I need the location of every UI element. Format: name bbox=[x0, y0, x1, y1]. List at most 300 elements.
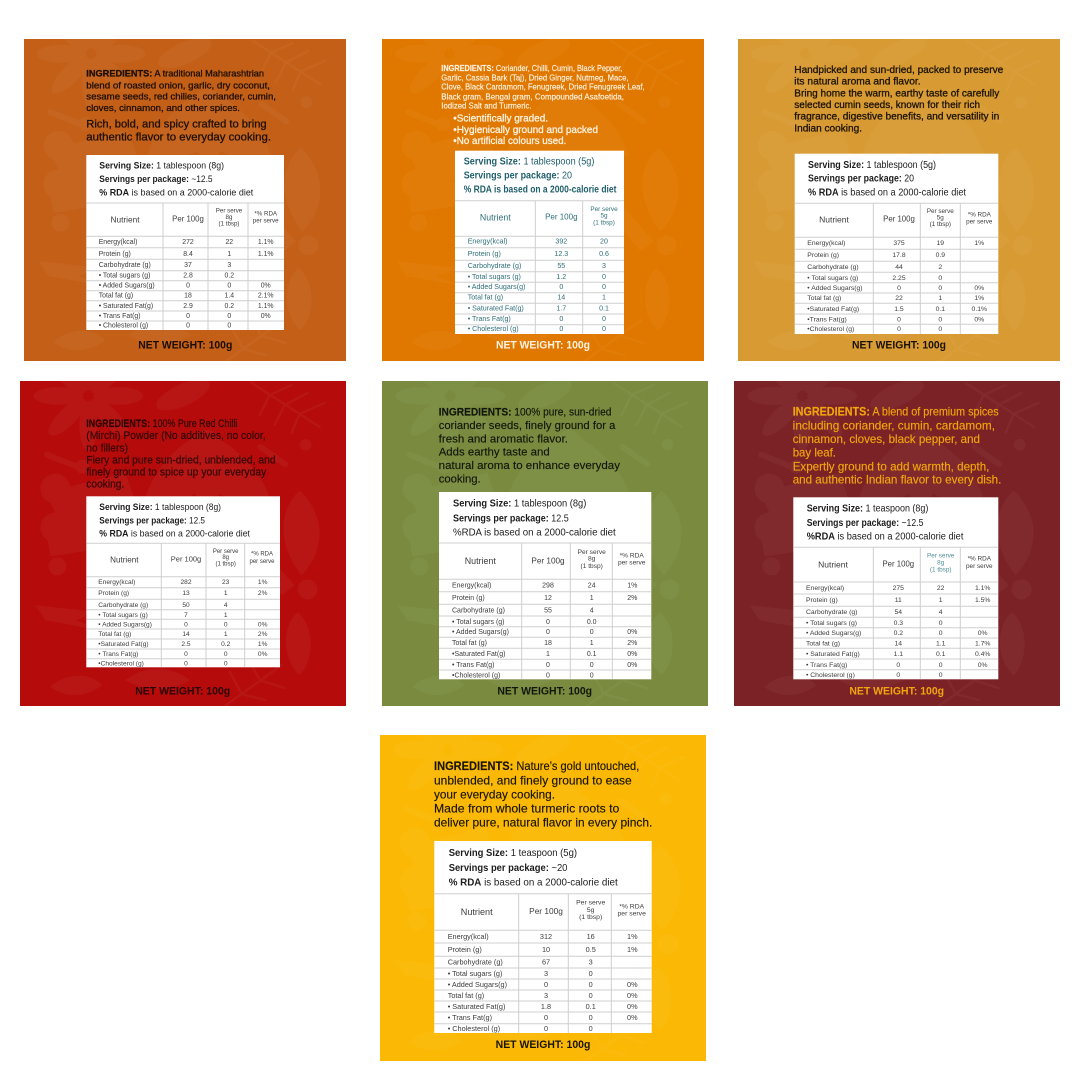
table rows: Total fat (g) bbox=[99, 292, 133, 300]
serving information bbox=[464, 156, 617, 196]
table rows: 0 bbox=[939, 672, 943, 679]
table rows: Total fat (g) bbox=[806, 640, 840, 648]
table rows: Carbohydrate (g) bbox=[452, 608, 505, 614]
table rows: •Saturated Fat(g) bbox=[98, 641, 149, 648]
table rows: 0% bbox=[974, 285, 984, 292]
table rows: 2.1% bbox=[258, 292, 274, 300]
table rows: • Added Sugars(g) bbox=[807, 285, 863, 292]
ingredients text: Black gram, Bengal gram, Compounded Asafoetida, bbox=[441, 92, 624, 101]
table rows: 0 bbox=[544, 1024, 548, 1033]
table rows: 2.5 bbox=[181, 641, 191, 648]
table rows: 1 bbox=[590, 640, 594, 647]
table header: (1 tbsp) bbox=[216, 562, 236, 568]
table header: per serve bbox=[618, 911, 646, 918]
table rows: 1 bbox=[224, 612, 228, 619]
table rows: Energy(kcal) bbox=[98, 579, 135, 586]
table rows: 298 bbox=[542, 582, 554, 590]
serving information: Serving Size: 1 teaspoon (5g) bbox=[449, 848, 577, 859]
table header: *% RDA bbox=[968, 556, 992, 563]
table header: per serve bbox=[249, 559, 275, 565]
table rows: 1% bbox=[258, 579, 268, 586]
table rows: 0 bbox=[602, 325, 606, 333]
ingredients text bbox=[86, 68, 276, 143]
table rows: 19 bbox=[937, 240, 944, 247]
ingredients text: Iodized Salt and Turmeric. bbox=[441, 101, 532, 110]
serving information: % RDA is based on a 2000-calorie diet bbox=[99, 187, 254, 198]
table header: *% RDA bbox=[968, 212, 992, 219]
table rows: 0 bbox=[224, 651, 228, 658]
ingredients text: Expertly ground to add warmth, depth, bbox=[793, 460, 989, 473]
serving information: Serving Size: 1 teaspoon (8g) bbox=[807, 503, 928, 514]
ingredients text: coriander seeds, finely ground for a bbox=[439, 420, 616, 432]
serving information: Serving Size: 1 tablespoon (8g) bbox=[99, 161, 224, 172]
table rows: 0 bbox=[589, 969, 593, 978]
table rows: 1 bbox=[224, 590, 228, 597]
table rows: Energy(kcal) bbox=[806, 585, 844, 592]
net weight: NET WEIGHT: 100g bbox=[135, 685, 230, 697]
table header: 5g bbox=[587, 907, 595, 914]
table header: Per 100g bbox=[171, 554, 201, 563]
serving information: Servings per package: 20 bbox=[464, 171, 572, 182]
ingredients text: blend of roasted onion, garlic, dry coconut, bbox=[86, 79, 270, 90]
table rows: 14 bbox=[182, 631, 190, 638]
table rows: 0 bbox=[938, 316, 942, 324]
table rows: • Added Sugars(g) bbox=[98, 622, 152, 628]
table rows: 2% bbox=[258, 590, 268, 597]
table rows: • Added Sugars(g) bbox=[448, 980, 507, 989]
table rows: Carbohydrate (g) bbox=[98, 602, 148, 609]
ingredients text: including coriander, cumin, cardamom, bbox=[793, 419, 995, 432]
serving information: Serving Size: 1 tablespoon (5g) bbox=[464, 156, 594, 167]
table rows: 0% bbox=[627, 651, 637, 658]
table header: *% RDA bbox=[620, 552, 644, 559]
table rows: 10 bbox=[542, 945, 550, 954]
ingredients text: cinnamon, cloves, black pepper, and bbox=[793, 433, 980, 446]
table rows: • Cholesterol (g) bbox=[99, 322, 148, 330]
table rows: 0 bbox=[559, 315, 563, 323]
table rows: • Total sugars (g) bbox=[452, 619, 505, 626]
serving information: Serving Size: 1 tablespoon (8g) bbox=[453, 499, 586, 510]
table header: 8g bbox=[222, 555, 229, 561]
table rows: 0.0 bbox=[587, 619, 597, 626]
table rows: Total fat (g) bbox=[452, 640, 487, 647]
table rows: 0% bbox=[974, 316, 984, 324]
table rows: 0 bbox=[939, 662, 943, 669]
ingredients text: fresh and aromatic flavor. bbox=[439, 433, 568, 445]
table rows: 1.1% bbox=[258, 303, 274, 310]
table rows: 55 bbox=[544, 608, 552, 614]
serving information: Servings per package: ~12.5 bbox=[99, 174, 213, 185]
table header: Nutrient bbox=[461, 907, 493, 917]
table rows: • Added Sugars(g) bbox=[468, 283, 525, 291]
table rows: 0 bbox=[589, 991, 593, 1000]
table rows: 1% bbox=[974, 295, 984, 302]
table rows: Total fat (g) bbox=[807, 295, 841, 302]
table rows: Carbohydrate (g) bbox=[807, 264, 859, 271]
table rows: 0 bbox=[546, 629, 550, 636]
table rows: 20 bbox=[600, 238, 608, 246]
ingredients text: Fiery and pure sun-dried, unblended, and bbox=[86, 454, 276, 466]
table header: (1 tbsp) bbox=[219, 221, 239, 228]
nutrition table bbox=[455, 151, 624, 334]
ingredients text: INGREDIENTS: A blend of premium spices bbox=[793, 406, 999, 419]
table rows: 0 bbox=[227, 322, 231, 330]
nutrition table bbox=[795, 154, 998, 334]
panel background with spice pattern bbox=[734, 341, 1060, 706]
table rows: 0 bbox=[589, 1024, 593, 1033]
table rows: 0 bbox=[589, 980, 593, 989]
table header: Per serve bbox=[578, 549, 606, 556]
table rows: 22 bbox=[225, 239, 233, 246]
table rows: 0 bbox=[939, 630, 943, 637]
panel: coriander powder bbox=[382, 341, 708, 706]
table rows: 392 bbox=[555, 238, 567, 246]
table header: (1 tbsp) bbox=[579, 914, 602, 921]
ingredients text: Clove, Black Cardamom, Fenugreek, Dried Fenugreek Leaf, bbox=[441, 83, 645, 92]
table rows: 1 bbox=[602, 294, 606, 302]
ingredients text: finely ground to spice up your everyday bbox=[86, 467, 267, 479]
table rows: Carbohydrate (g) bbox=[448, 958, 503, 966]
table rows: 1.1% bbox=[975, 585, 990, 592]
table rows: 0 bbox=[544, 1013, 548, 1022]
table rows: •Saturated Fat(g) bbox=[452, 651, 505, 658]
table rows: 50 bbox=[182, 602, 190, 609]
net weight: NET WEIGHT: 100g bbox=[497, 685, 592, 697]
feature bullets: •Scientifically graded. bbox=[453, 114, 548, 125]
net weight: NET WEIGHT: 100g bbox=[138, 340, 232, 352]
table rows: 0 bbox=[184, 660, 188, 668]
table rows: 1.5 bbox=[894, 306, 904, 313]
table header: *% RDA bbox=[619, 903, 645, 910]
table rows: 0 bbox=[559, 325, 563, 333]
table rows: 0.9 bbox=[936, 252, 945, 259]
table rows: 1.1% bbox=[258, 239, 274, 246]
table header: (1 tbsp) bbox=[581, 563, 603, 570]
table rows: 1 bbox=[939, 597, 943, 604]
table rows: 0.2 bbox=[221, 641, 231, 648]
table rows: 3 bbox=[602, 262, 606, 270]
ingredients text: cooking. bbox=[439, 473, 481, 485]
table header bbox=[818, 553, 993, 573]
table rows: Energy(kcal) bbox=[452, 582, 491, 590]
table rows: •Cholesterol (g) bbox=[807, 326, 854, 333]
table rows: 0 bbox=[186, 322, 190, 330]
table rows: 1.1 bbox=[894, 651, 903, 658]
table rows: 12 bbox=[544, 595, 552, 602]
description text: Indian cooking. bbox=[794, 123, 862, 134]
table rows: 0 bbox=[546, 662, 550, 669]
table rows: 375 bbox=[893, 240, 905, 247]
table header: Nutrient bbox=[818, 559, 849, 569]
table rows: 1% bbox=[627, 945, 638, 954]
table rows: • Trans Fat(g) bbox=[448, 1013, 492, 1022]
table rows: 11 bbox=[895, 597, 902, 604]
table rows: 7 bbox=[184, 612, 188, 619]
table rows: 0 bbox=[589, 1013, 593, 1022]
table rows: • Total sugars (g) bbox=[468, 273, 521, 281]
table rows: 0 bbox=[227, 313, 231, 320]
table rows: Energy(kcal) bbox=[468, 238, 508, 246]
table rows: 1% bbox=[627, 932, 638, 941]
table rows: Protein (g) bbox=[99, 251, 131, 258]
table rows: •Cholesterol (g) bbox=[452, 672, 500, 680]
table rows: 1 bbox=[546, 651, 550, 658]
table rows: 0 bbox=[896, 662, 900, 669]
table rows: 1 bbox=[938, 295, 942, 302]
ingredients text: deliver pure, natural flavor in every pinch. bbox=[434, 815, 652, 829]
panel: sambar masala bbox=[382, 0, 704, 361]
table rows: 54 bbox=[895, 609, 902, 616]
table rows: 0.1 bbox=[587, 651, 597, 658]
table header: 8g bbox=[937, 560, 945, 567]
table header bbox=[819, 208, 993, 228]
table rows: 3 bbox=[227, 262, 231, 269]
table rows: 4 bbox=[939, 609, 943, 616]
ingredients text: INGREDIENTS: Coriander, Chilli, Cumin, Black Pepper, bbox=[441, 64, 622, 73]
table rows: 14 bbox=[557, 294, 565, 302]
table rows: 275 bbox=[893, 585, 904, 592]
panel: Maharashtrian masala bbox=[24, 0, 346, 361]
panel: turmeric powder bbox=[380, 695, 706, 1061]
table header: *% RDA bbox=[251, 552, 273, 558]
table rows: 0 bbox=[224, 660, 228, 668]
serving information: % RDA is based on a 2000-calorie diet bbox=[99, 527, 250, 538]
table rows: 23 bbox=[222, 579, 230, 586]
table rows: 14 bbox=[895, 640, 902, 648]
table header: 8g bbox=[226, 214, 233, 221]
table rows: Energy(kcal) bbox=[448, 932, 489, 941]
table header: per serve bbox=[253, 217, 279, 224]
table rows: Total fat (g) bbox=[98, 631, 131, 638]
table header: Per 100g bbox=[529, 906, 563, 916]
table rows: 2% bbox=[627, 640, 637, 647]
table rows: 0% bbox=[261, 313, 271, 320]
table header: (1 tbsp) bbox=[930, 221, 951, 228]
table rows: Energy(kcal) bbox=[99, 239, 137, 246]
ingredients text: INGREDIENTS: 100% Pure Red Chilli bbox=[86, 418, 237, 430]
table rows: • Trans Fat(g) bbox=[468, 315, 511, 323]
ingredients text: unblended, and finely ground to ease bbox=[434, 773, 632, 787]
table header: per serve bbox=[966, 219, 993, 226]
table rows: 0 bbox=[938, 275, 942, 282]
table rows: • Added Sugars(g) bbox=[806, 630, 861, 637]
table rows: 0 bbox=[546, 672, 550, 680]
table rows: Energy(kcal) bbox=[807, 240, 845, 247]
description text: its natural aroma and flavor. bbox=[794, 77, 921, 88]
table rows: 0.1 bbox=[936, 651, 946, 658]
table rows: Total fat (g) bbox=[448, 991, 484, 1000]
table rows: 0 bbox=[184, 651, 188, 658]
table rows: 0 bbox=[186, 282, 190, 290]
table rows: 0% bbox=[627, 991, 638, 1000]
table rows: 0 bbox=[896, 672, 900, 679]
table header: (1 tbsp) bbox=[930, 566, 952, 573]
table rows: 2.9 bbox=[183, 303, 193, 310]
table header: 5g bbox=[937, 214, 944, 221]
description text: Handpicked and sun-dried, packed to preserve bbox=[794, 65, 1004, 76]
serving information: %RDA is based on a 2000-calorie diet bbox=[807, 531, 964, 542]
table rows: 4 bbox=[224, 602, 228, 609]
table rows: 44 bbox=[895, 264, 903, 271]
table rows bbox=[448, 932, 638, 1033]
nutrition table bbox=[86, 155, 284, 330]
table header: Nutrient bbox=[110, 214, 140, 224]
table rows: 0 bbox=[590, 672, 594, 680]
net weight: NET WEIGHT: 100g bbox=[496, 1039, 590, 1051]
serving information: % RDA is based on a 2000-calorie diet bbox=[808, 187, 966, 198]
table rows: Carbohydrate (g) bbox=[99, 262, 151, 269]
table rows: • Trans Fat(g) bbox=[99, 313, 141, 320]
ingredients text: Adds earthy taste and bbox=[439, 447, 550, 459]
table rows: • Cholesterol (g) bbox=[448, 1024, 500, 1033]
table rows: 18 bbox=[544, 640, 552, 647]
description text bbox=[794, 65, 1004, 134]
table rows: 1.4 bbox=[225, 292, 234, 300]
table rows: 0% bbox=[978, 662, 988, 669]
table rows: Total fat (g) bbox=[468, 294, 503, 302]
ingredients text: Made from whole turmeric roots to bbox=[434, 801, 620, 815]
table rows: 0 bbox=[897, 316, 901, 324]
table rows: 0% bbox=[627, 629, 637, 636]
table rows: 0.1 bbox=[586, 1002, 596, 1011]
table rows: Protein (g) bbox=[452, 595, 485, 602]
table rows: 0% bbox=[978, 630, 988, 637]
table rows: 22 bbox=[895, 295, 903, 302]
table header bbox=[110, 549, 275, 568]
table rows: 3 bbox=[589, 958, 593, 966]
table rows: 16 bbox=[587, 932, 595, 941]
table rows: 0 bbox=[224, 622, 228, 628]
table rows: Carbohydrate (g) bbox=[468, 262, 521, 270]
table rows: • Total sugars (g) bbox=[448, 969, 502, 978]
table rows: 13 bbox=[182, 590, 190, 597]
table rows: 0 bbox=[602, 283, 606, 291]
table rows: 55 bbox=[557, 262, 565, 270]
table rows: 1 bbox=[224, 631, 228, 638]
table rows: 2% bbox=[258, 631, 268, 638]
serving information bbox=[99, 501, 250, 538]
table rows: 0% bbox=[627, 980, 638, 989]
table header: Per 100g bbox=[172, 215, 204, 224]
table header: Per serve bbox=[216, 208, 243, 215]
table rows: 1.1% bbox=[258, 251, 274, 258]
table rows: 0 bbox=[897, 285, 901, 292]
ingredients text: (Mirchi) Powder (No additives, no color, bbox=[86, 430, 266, 442]
table rows: 1% bbox=[627, 582, 637, 590]
serving information bbox=[453, 499, 616, 538]
table rows: 3 bbox=[544, 969, 548, 978]
table header: Per serve bbox=[576, 900, 605, 907]
table rows: 3 bbox=[544, 991, 548, 1000]
description text: fragrance, digestive benefits, and versatility in bbox=[794, 112, 999, 123]
table rows: 1 bbox=[590, 595, 594, 602]
table rows: 1.8 bbox=[541, 1002, 551, 1011]
table rows: 18 bbox=[184, 292, 192, 300]
ingredients text: cloves, cinnamon, and other spices. bbox=[86, 102, 240, 113]
serving information: Servings per package: ~12.5 bbox=[807, 518, 924, 529]
table rows: 0.4% bbox=[975, 651, 990, 658]
table header: Nutrient bbox=[465, 556, 496, 566]
table rows: 0 bbox=[939, 620, 943, 627]
table rows: 0 bbox=[227, 282, 231, 290]
serving information: Servings per package: 12.5 bbox=[453, 513, 569, 524]
table rows: • Total sugars (g) bbox=[807, 275, 858, 282]
table rows: 0 bbox=[184, 622, 188, 628]
table rows: 0% bbox=[261, 282, 271, 290]
panel background with spice pattern bbox=[380, 695, 706, 1061]
table rows: 17.8 bbox=[892, 252, 906, 259]
description text: selected cumin seeds, known for their rich bbox=[794, 100, 980, 111]
table header bbox=[465, 549, 646, 570]
table header: Per serve bbox=[927, 553, 955, 560]
net weight: NET WEIGHT: 100g bbox=[849, 685, 944, 697]
table header: per serve bbox=[966, 563, 993, 570]
table rows: 1.5% bbox=[975, 597, 990, 604]
table rows: 1.7% bbox=[975, 640, 990, 648]
serving information: % RDA is based on a 2000-calorie diet bbox=[464, 185, 617, 196]
serving information: Serving Size: 1 tablespoon (5g) bbox=[808, 160, 936, 171]
table header: Per serve bbox=[590, 206, 618, 213]
feature bullets: •No artificial colours used. bbox=[453, 136, 566, 147]
table rows: 1.7 bbox=[556, 304, 566, 312]
table rows: 0 bbox=[602, 273, 606, 281]
table header: (1 tbsp) bbox=[593, 219, 615, 226]
table rows: •Cholesterol (g) bbox=[98, 660, 144, 668]
table rows bbox=[99, 239, 274, 330]
table rows: • Cholesterol (g) bbox=[468, 325, 519, 333]
panel background with spice pattern bbox=[382, 341, 708, 706]
ingredients text bbox=[793, 406, 1001, 487]
table header: Per serve bbox=[927, 208, 954, 215]
serving information: Serving Size: 1 tablespoon (8g) bbox=[99, 501, 221, 512]
ingredients text: Garlic, Cassia Bark (Taj), Dried Ginger, Nutmeg, Mace, bbox=[441, 73, 629, 82]
table rows: 37 bbox=[184, 262, 192, 269]
table rows: 2.8 bbox=[183, 272, 193, 280]
table rows: 312 bbox=[540, 932, 552, 941]
table rows: • Total sugars (g) bbox=[806, 620, 857, 627]
panel background with spice pattern bbox=[20, 341, 346, 706]
table rows: 22 bbox=[937, 585, 945, 592]
table rows bbox=[807, 240, 987, 333]
serving information: %RDA is based on a 2000-calorie diet bbox=[453, 527, 616, 538]
table rows: • Cholesterol (g) bbox=[806, 672, 855, 679]
table header bbox=[461, 900, 646, 921]
table header: Nutrient bbox=[110, 555, 139, 564]
table rows: • Saturated Fat(g) bbox=[448, 1002, 505, 1011]
table header: Nutrient bbox=[480, 213, 511, 223]
table rows: • Added Sugars(g) bbox=[99, 282, 155, 290]
table rows: 0% bbox=[627, 1002, 638, 1011]
table rows: 0.1 bbox=[936, 306, 945, 313]
table rows: 2.25 bbox=[892, 275, 906, 282]
table rows: 1.1 bbox=[936, 640, 946, 648]
ingredients text: INGREDIENTS: 100% pure, sun-dried bbox=[439, 407, 611, 419]
table rows: 2 bbox=[938, 264, 942, 271]
ingredients text: INGREDIENTS: A traditional Maharashtrian bbox=[86, 68, 264, 79]
description text: Bring home the warm, earthy taste of carefully bbox=[794, 88, 999, 99]
table rows: 67 bbox=[542, 958, 550, 966]
table header: *% RDA bbox=[254, 210, 278, 217]
table rows: 2% bbox=[627, 595, 637, 602]
table header: 8g bbox=[588, 556, 596, 563]
table rows: 1.2 bbox=[556, 273, 566, 281]
table rows: 24 bbox=[588, 582, 596, 590]
table rows: • Saturated Fat(g) bbox=[468, 304, 524, 312]
nutrition table bbox=[439, 492, 651, 680]
table rows: • Saturated Fat(g) bbox=[99, 303, 153, 310]
table rows: 0% bbox=[627, 662, 637, 669]
ingredients text bbox=[439, 407, 620, 485]
